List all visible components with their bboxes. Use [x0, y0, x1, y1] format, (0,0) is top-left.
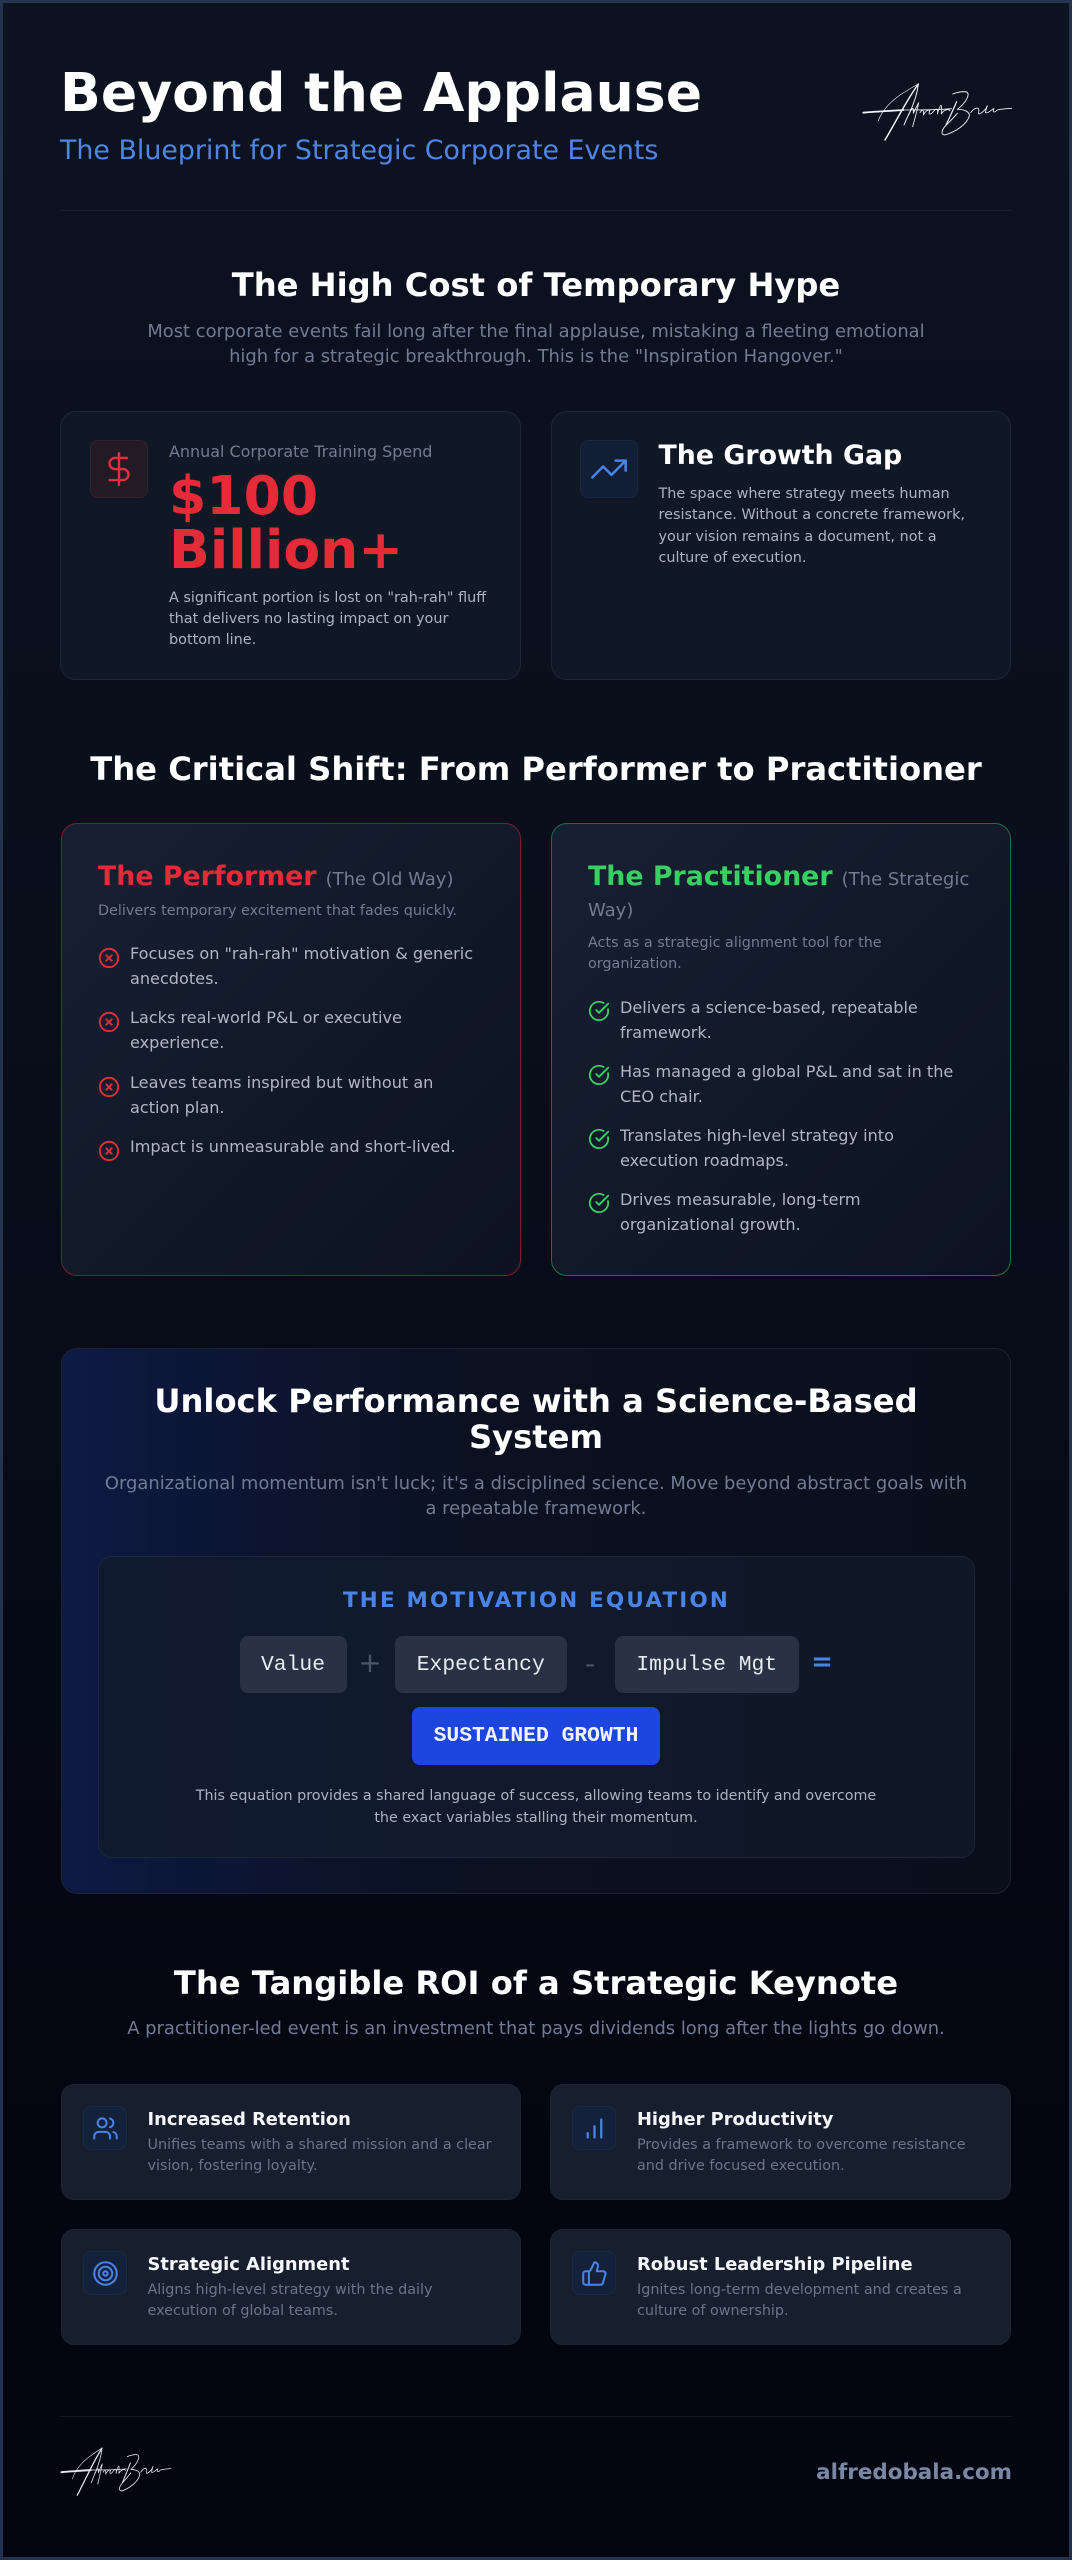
icon: thumbs up — [572, 2251, 616, 2295]
item 2: Lacks real-world P&L or executive — [130, 1008, 402, 1027]
section heading: high cost: The High Cost of Temporary Hype — [232, 266, 840, 304]
performer summary: Delivers temporary excitement that fades quickly. — [98, 902, 457, 918]
stat description: that delivers no lasting impact on your — [169, 611, 448, 627]
section heading — [154, 1382, 918, 1456]
operator: minus: - — [585, 1647, 595, 1680]
performer heading: The Performer (The Old Way) — [98, 861, 453, 892]
roi card: alignment — [61, 2229, 521, 2345]
roi card: productivity — [550, 2084, 1011, 2200]
description: Unifies teams with a shared mission and a clear — [148, 2136, 492, 2152]
stat value: Billion+ — [169, 518, 403, 581]
panel: science-based system — [61, 1348, 1011, 1894]
item 4: organizational growth. — [620, 1215, 801, 1234]
item 3 — [588, 1126, 894, 1170]
item 1: anecdotes. — [130, 969, 219, 988]
result: sustained growth — [412, 1707, 660, 1765]
roi card: retention — [61, 2084, 521, 2200]
icon: target — [83, 2251, 127, 2295]
chip: expectancy — [395, 1636, 566, 1693]
description: culture of ownership. — [637, 2303, 789, 2319]
card description: resistance. Without a concrete framework, — [658, 507, 965, 523]
stat value: $100 — [169, 464, 318, 527]
card description: your vision remains a document, not a — [658, 529, 937, 545]
item 1 — [588, 998, 918, 1042]
item 4 — [588, 1190, 860, 1234]
item 2: CEO chair. — [620, 1087, 703, 1106]
equation note: the exact variables stalling their momentum. — [374, 1810, 698, 1826]
section intro: high cost — [147, 321, 925, 367]
card description: The space where strategy meets human — [658, 486, 950, 502]
section heading: System — [469, 1418, 603, 1456]
result: sustained growth: SUSTAINED GROWTH — [434, 1724, 638, 1748]
footer divider — [60, 2416, 1012, 2417]
title: Beyond the Applause — [60, 61, 702, 124]
item 3: execution roadmaps. — [620, 1151, 789, 1170]
item 1: Delivers a science-based, repeatable — [620, 998, 918, 1017]
description: execution of global teams. — [148, 2303, 338, 2319]
section intro: high cost: high for a strategic breakthrough. This is the "Inspiration Hangover." — [229, 346, 843, 367]
signature: footer — [60, 2447, 172, 2496]
subtitle: The Blueprint for Strategic Corporate Events — [60, 135, 658, 166]
stat label: Annual Corporate Training Spend — [169, 442, 432, 461]
card description — [658, 486, 965, 566]
header divider — [60, 210, 1012, 211]
stat description: A significant portion is lost on "rah-rah" fluff — [169, 590, 486, 606]
panel: the performer — [61, 823, 521, 1276]
item 2 — [588, 1062, 953, 1106]
practitioner summary: organization. — [588, 956, 682, 972]
operator: equals: = — [811, 1647, 833, 1677]
practitioner heading: The Practitioner (The Strategic — [588, 861, 969, 892]
heading: Strategic Alignment — [148, 2254, 349, 2275]
roi card: leadership — [550, 2229, 1011, 2345]
equation note — [196, 1788, 876, 1826]
description — [148, 2282, 432, 2319]
panel: training spend — [60, 411, 521, 680]
footer website: alfredobala.com — [816, 2460, 1012, 2485]
heading: Increased Retention — [148, 2109, 351, 2130]
equation note: This equation provides a shared language of success, allowing teams to identify and overcome — [196, 1788, 876, 1804]
panel: motivation equation — [98, 1556, 975, 1858]
icon: users — [83, 2106, 127, 2150]
item 2 — [98, 1008, 402, 1052]
item 3 — [98, 1073, 433, 1117]
description: Ignites long-term development and creates a — [637, 2282, 962, 2298]
item 2: Has managed a global P&L and sat in the — [620, 1062, 953, 1081]
item 2: experience. — [130, 1033, 224, 1052]
section heading: roi: The Tangible ROI of a Strategic Keynote — [174, 1964, 898, 2002]
description — [148, 2136, 492, 2174]
description: Aligns high-level strategy with the daily — [148, 2282, 432, 2298]
card heading: The Growth Gap — [658, 440, 902, 470]
item 1: framework. — [620, 1023, 712, 1042]
section intro: roi: A practitioner-led event is an investment that pays dividends long after the lights go down. — [127, 2018, 945, 2039]
signature: header — [862, 83, 1012, 141]
section heading: Unlock Performance with a Science-Based — [154, 1382, 918, 1420]
description — [637, 2282, 962, 2319]
item 3: Translates high-level strategy into — [620, 1126, 894, 1145]
stat value — [169, 464, 403, 581]
description: vision, fostering loyalty. — [148, 2158, 317, 2174]
panel: the practitioner — [551, 823, 1011, 1276]
heading: Robust Leadership Pipeline — [637, 2254, 913, 2275]
stat description: bottom line. — [169, 632, 256, 648]
practitioner summary: Acts as a strategic alignment tool for the — [588, 934, 882, 950]
section intro: high cost: Most corporate events fail long after the final applause, mistaking a fleeting emotional — [147, 321, 925, 342]
heading: Higher Productivity — [637, 2109, 833, 2130]
section intro: a repeatable framework. — [426, 1498, 646, 1519]
item 4: Drives measurable, long-term — [620, 1190, 860, 1209]
practitioner heading continuation: Way) — [588, 900, 633, 921]
practitioner list — [588, 998, 953, 1234]
stat description — [169, 590, 486, 648]
chip: value: Value — [261, 1652, 325, 1676]
chip: expectancy: Expectancy — [417, 1652, 545, 1676]
card description: culture of execution. — [658, 550, 806, 566]
panel: growth gap — [551, 411, 1011, 680]
icon: bars — [572, 2106, 616, 2150]
description — [637, 2136, 966, 2174]
item 4: Impact is unmeasurable and short-lived. — [130, 1137, 456, 1156]
item 3: Leaves teams inspired but without an — [130, 1073, 433, 1092]
chip: impulse management: Impulse Mgt — [636, 1652, 777, 1676]
item 1: Focuses on "rah-rah" motivation & generic — [130, 944, 473, 963]
chip: impulse management — [615, 1636, 798, 1693]
description: Provides a framework to overcome resistance — [637, 2136, 966, 2152]
icon: trending up — [580, 440, 638, 498]
section heading: critical shift: The Critical Shift: From Performer to Practitioner — [90, 750, 982, 788]
chip: value — [240, 1636, 346, 1693]
item 3: action plan. — [130, 1098, 225, 1117]
performer list — [98, 944, 473, 1162]
operator: plus: + — [358, 1646, 382, 1679]
section intro: Organizational momentum isn't luck; it's a disciplined science. Move beyond abstract goals with — [105, 1473, 967, 1494]
description: and drive focused execution. — [637, 2158, 845, 2174]
section intro — [105, 1473, 967, 1519]
item 1 — [98, 944, 473, 988]
equation title: THE MOTIVATION EQUATION — [343, 1588, 730, 1612]
icon: dollar — [90, 440, 148, 498]
practitioner summary — [588, 934, 882, 972]
